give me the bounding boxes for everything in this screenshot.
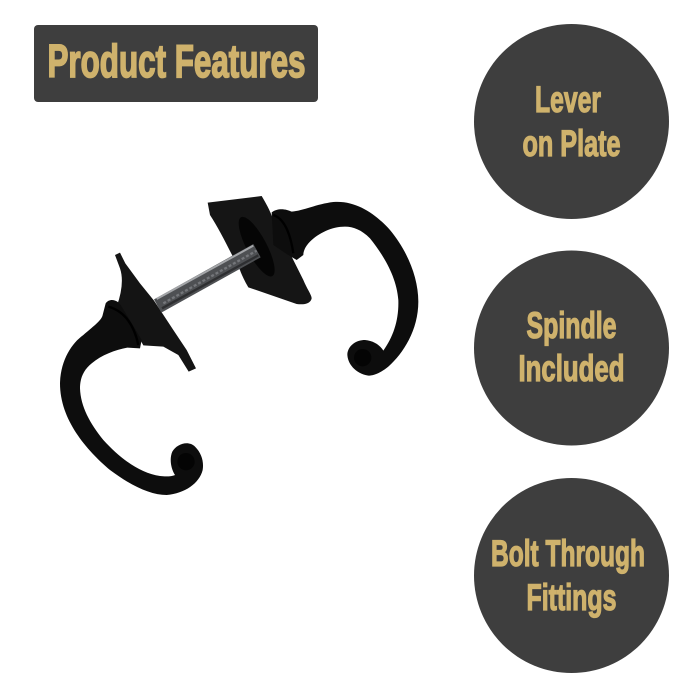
title banner: Product Features — [48, 35, 306, 87]
feature circle: bolt through fittings: Fittings — [526, 577, 616, 618]
title banner — [34, 25, 318, 102]
right backplate — [208, 196, 312, 304]
spindle — [154, 244, 261, 313]
feature circle: lever on plate: Lever — [535, 79, 601, 120]
feature circle: spindle included — [474, 250, 669, 446]
product photo: lever handles on plates with spindle — [60, 196, 418, 495]
left backplate — [115, 253, 196, 372]
feature circle: lever on plate: on Plate — [522, 123, 620, 164]
feature circle: spindle included: Spindle — [526, 305, 616, 346]
feature circle: bolt through fittings — [474, 478, 669, 673]
feature circle: spindle included: Included — [518, 348, 624, 389]
right lever — [272, 202, 418, 376]
feature circle: lever on plate — [474, 24, 669, 219]
left lever — [60, 300, 203, 495]
